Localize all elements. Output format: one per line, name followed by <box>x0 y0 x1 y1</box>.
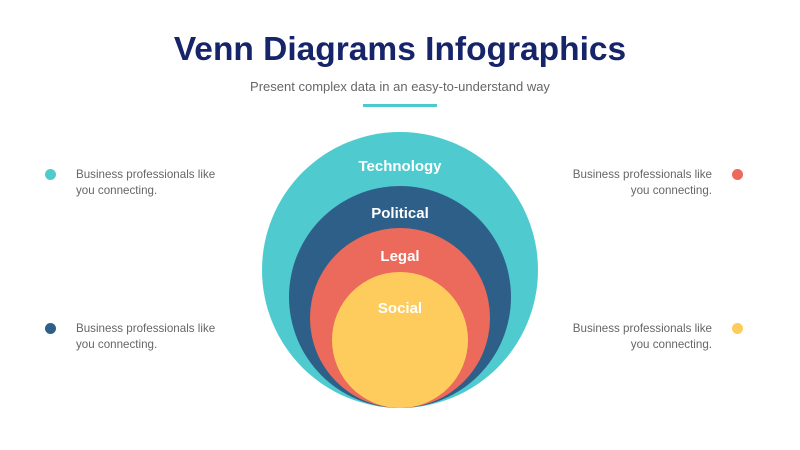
item left bottom: Business professionals like you connecting. <box>76 322 215 351</box>
underline accent <box>363 104 437 107</box>
subtitle: Present complex data in an easy-to-understand way <box>250 79 550 94</box>
label legal: Legal <box>380 248 420 265</box>
label social: Social <box>378 300 422 317</box>
title: Venn Diagrams Infographics <box>174 31 626 68</box>
item right top: Business professionals like you connecting. <box>573 168 712 197</box>
label technology: Technology <box>358 158 442 175</box>
item right bottom: Business professionals like you connecting. <box>573 322 712 351</box>
item left top: Business professionals like you connecting. <box>76 168 215 197</box>
label political: Political <box>371 205 429 222</box>
